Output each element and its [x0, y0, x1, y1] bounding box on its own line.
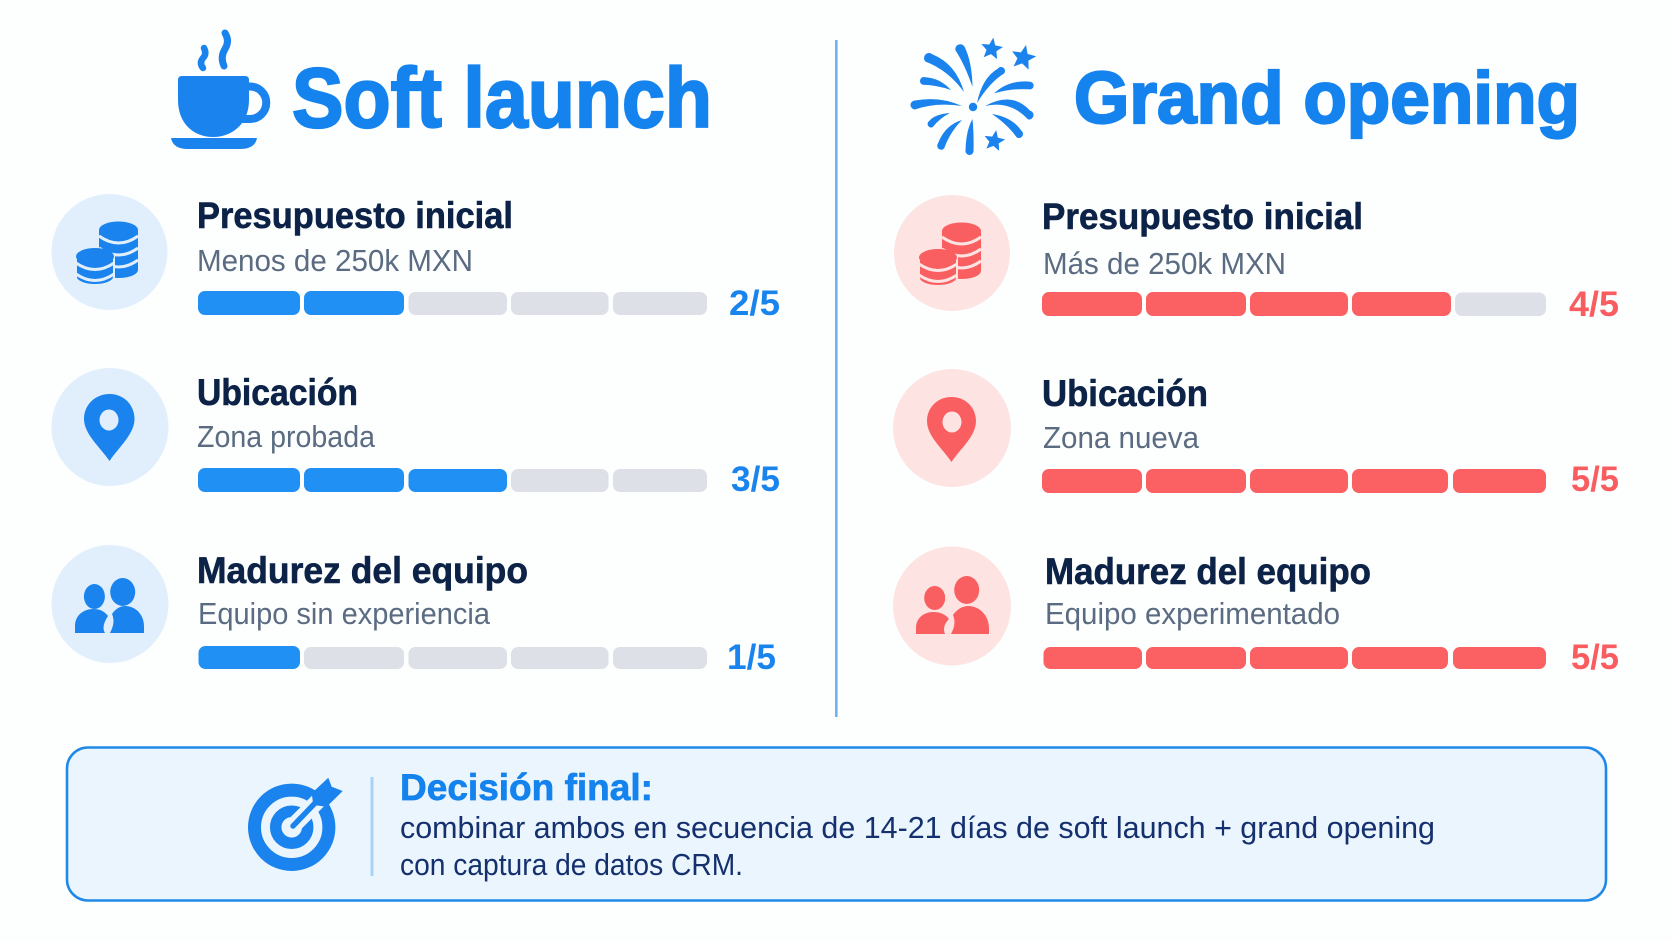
subtitle: Equipo sin experiencia: [198, 596, 491, 631]
panel: soft launch: [52, 33, 780, 677]
callout text line 2: con captura de datos CRM.: [400, 847, 743, 882]
row: presupuesto inicial: [52, 194, 780, 323]
divider in callout: [370, 777, 374, 876]
icon: people: [52, 545, 168, 663]
subtitle: Equipo experimentado: [1045, 596, 1340, 631]
icon: coins: [894, 195, 1010, 311]
score: 5/5: [1571, 460, 1619, 499]
score bar 2/5: [198, 291, 707, 315]
score bar 1/5: [198, 646, 707, 669]
icon: coins: [52, 194, 168, 310]
score: 5/5: [1571, 638, 1619, 677]
subtitle: Menos de 250k MXN: [197, 243, 473, 278]
score bar 5/5: [1044, 647, 1546, 669]
row: madurez del equipo: [52, 545, 776, 677]
title: Ubicación: [1042, 373, 1208, 414]
row: ubicacion: [52, 368, 780, 499]
score: 3/5: [731, 460, 780, 499]
panel: grand opening: [893, 36, 1619, 677]
title: Presupuesto inicial: [197, 195, 513, 236]
score bar 3/5: [198, 468, 707, 492]
score bar 5/5: [1042, 469, 1546, 493]
title: Madurez del equipo: [197, 550, 528, 591]
score: 1/5: [727, 638, 776, 677]
callout text line 1: combinar ambos en secuencia de 14-21 días de soft launch + grand opening: [400, 810, 1435, 845]
title: Ubicación: [197, 372, 358, 413]
row: ubicacion: [893, 369, 1619, 499]
icon: map pin: [52, 368, 168, 486]
icon: target with arrow: [255, 774, 345, 864]
icon: fireworks: [910, 36, 1038, 155]
subtitle: Zona probada: [197, 419, 376, 454]
subtitle: Más de 250k MXN: [1043, 246, 1286, 281]
heading: soft launch: Soft launch: [292, 51, 712, 145]
heading: grand opening: Grand opening: [1074, 58, 1580, 139]
callout: decision final: [67, 748, 1606, 900]
score bar 4/5: [1042, 292, 1546, 316]
icon: map pin: [893, 369, 1011, 487]
callout heading: Decisión final:: [400, 767, 653, 808]
row: madurez del equipo: [893, 546, 1619, 677]
score: 2/5: [729, 284, 780, 323]
icon: people: [893, 546, 1011, 666]
title: Presupuesto inicial: [1042, 196, 1363, 237]
score: 4/5: [1569, 285, 1619, 324]
title: Madurez del equipo: [1045, 551, 1371, 592]
subtitle: Zona nueva: [1043, 420, 1200, 455]
row: presupuesto inicial: [894, 195, 1619, 324]
icon: coffee cup: [171, 33, 266, 149]
